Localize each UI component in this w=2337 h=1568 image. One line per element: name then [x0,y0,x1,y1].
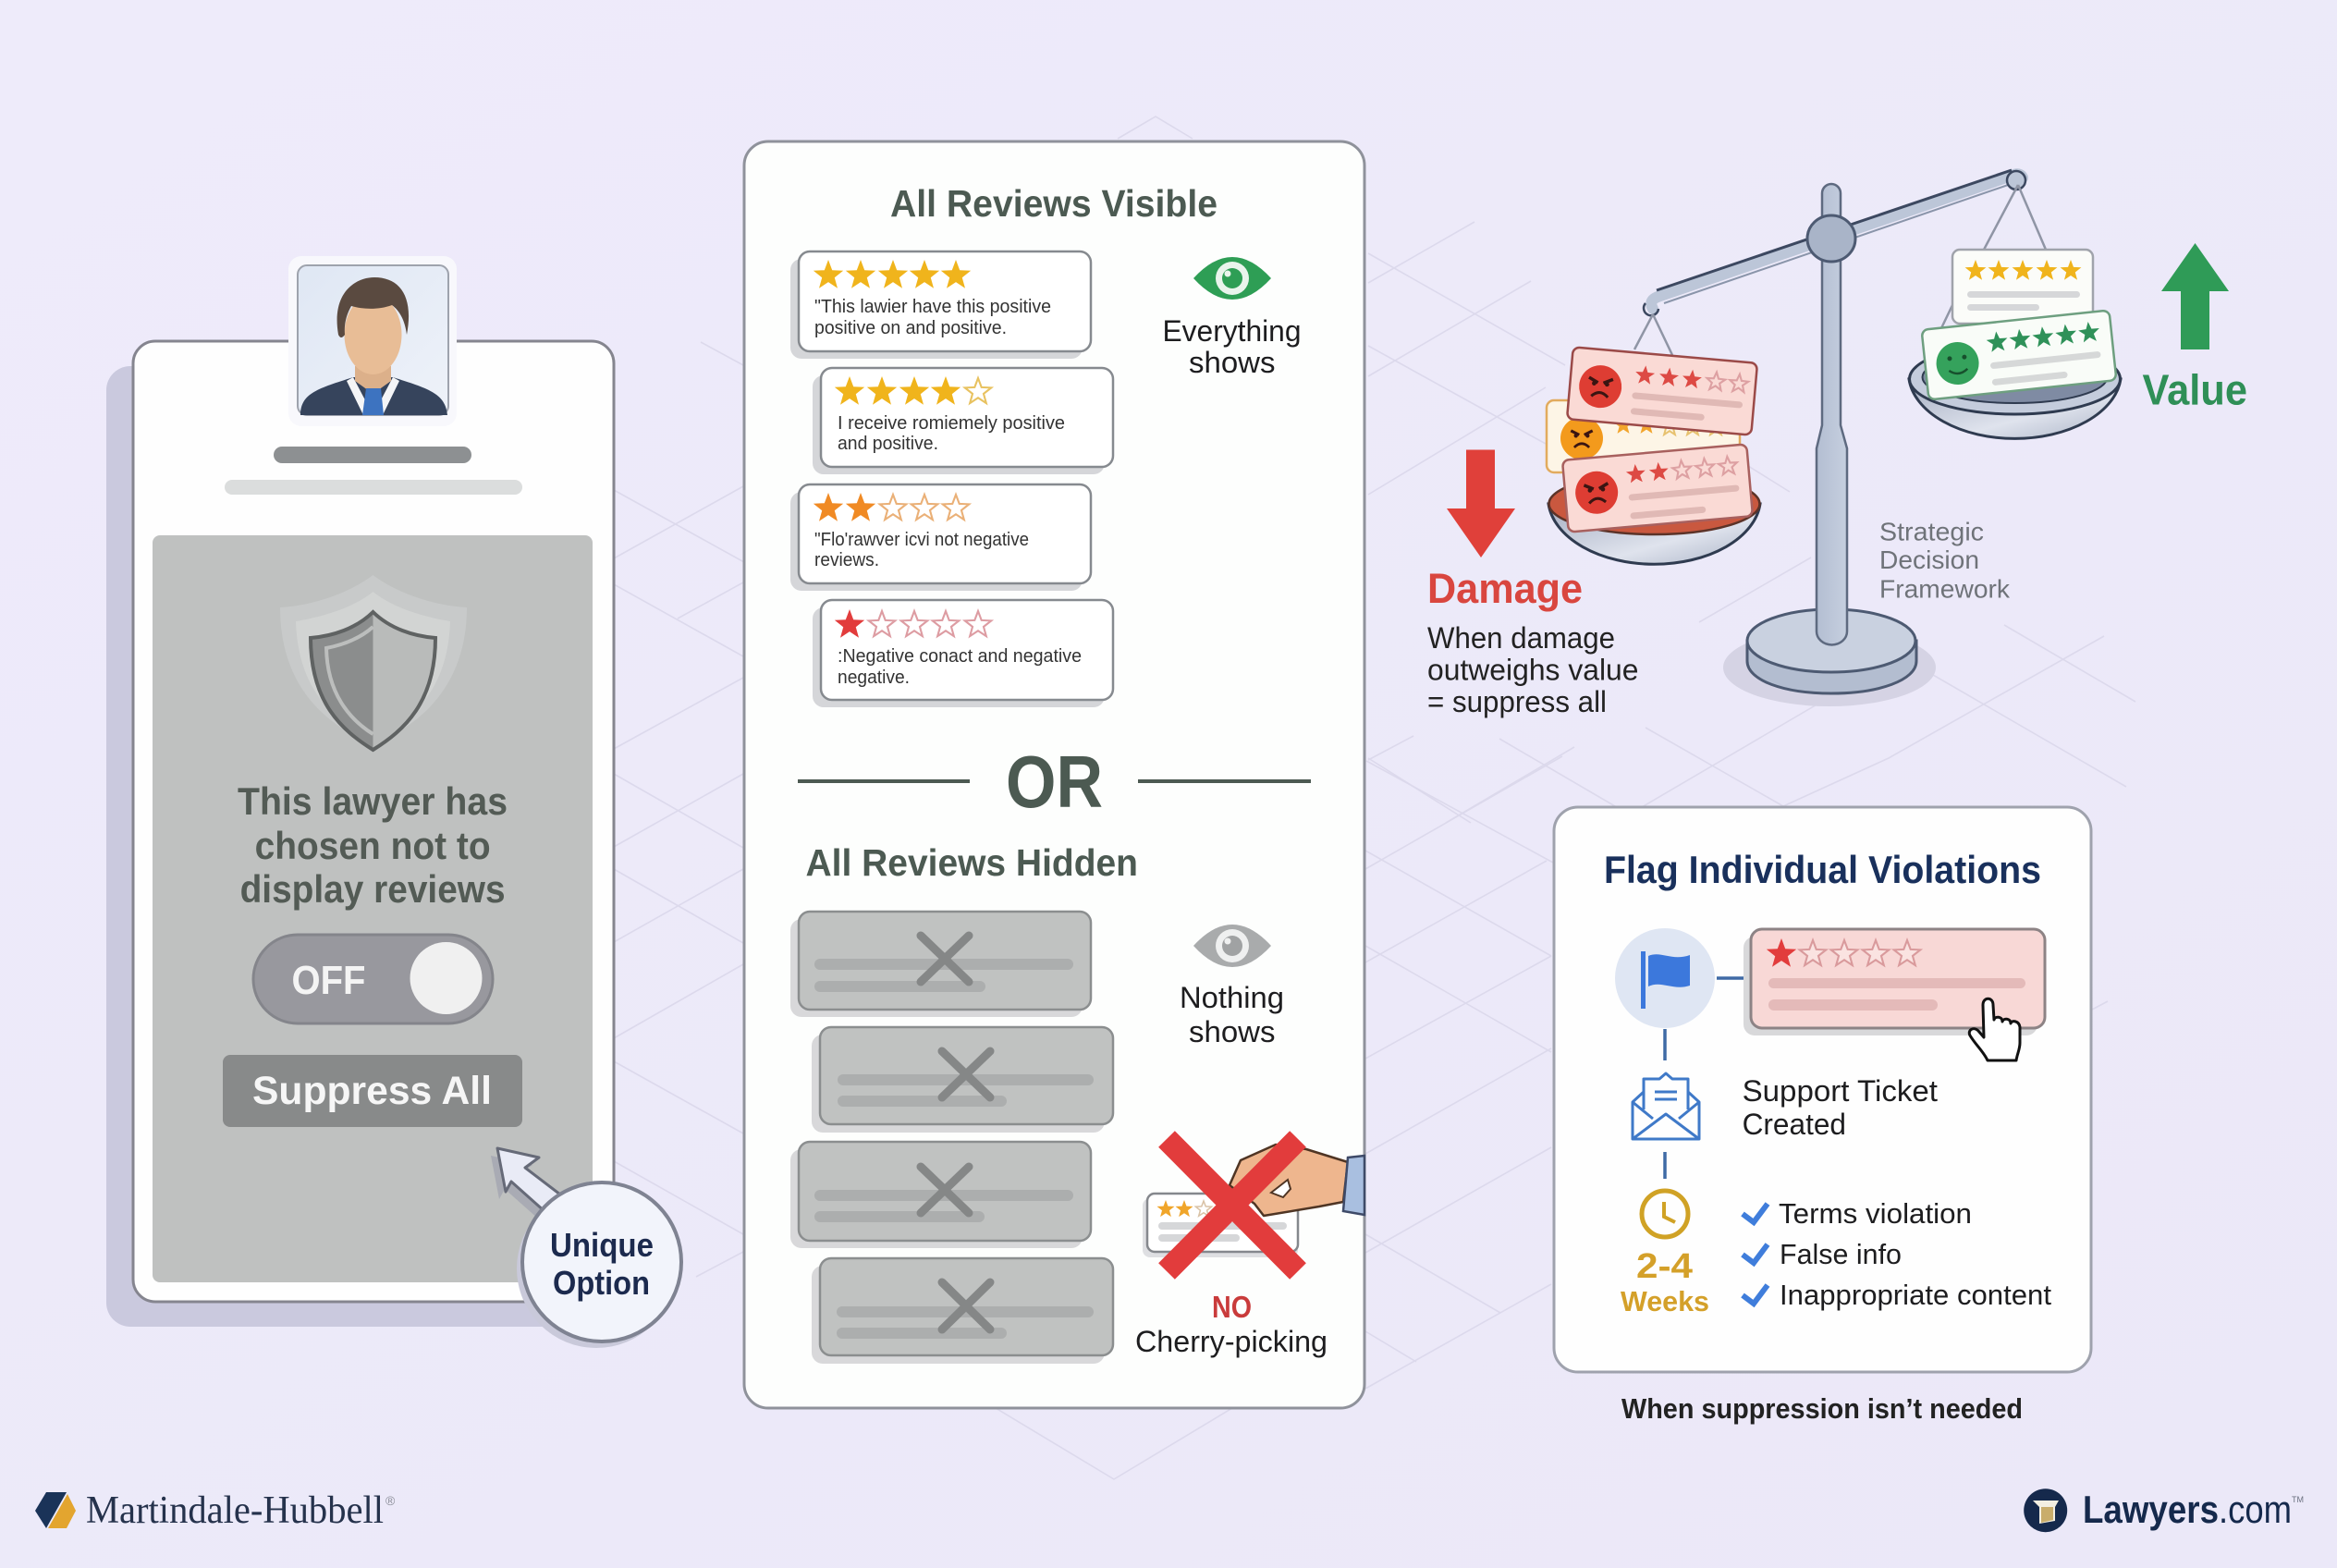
checklist: violation types: Terms violation [1779,1197,1972,1230]
arrow: damage down [1447,449,1515,557]
arrow: to suppress all [491,1148,560,1219]
review card: two stars: reviews. [814,550,879,570]
review card: two stars [790,484,1091,591]
scale beam [1644,170,2025,315]
logo: lawyers.com: .com [2219,1488,2292,1531]
text: suppression notice: display reviews [240,867,506,911]
review card: one star: negative. [838,668,910,688]
label: everything shows: Everything [1163,314,1302,348]
heading: all reviews hidden: All Reviews Hidden [806,841,1138,884]
text: damage rule: outweighs value [1427,653,1638,686]
panel: lawyer profile with suppress all [106,256,681,1348]
logo: lawyers.com [2024,1488,2304,1532]
illustration: balance scale [1547,170,2121,706]
review card: one star: :Negative conact and negative [838,646,1082,667]
icon: flag [1615,928,1715,1028]
logo: lawyers.com: Lawyers [2083,1488,2219,1531]
callout: unique option [517,1182,681,1348]
scale stand [1723,184,1936,706]
icon: green eye [1193,257,1271,300]
label: 2-4 weeks [1621,1247,1709,1317]
heading: all reviews visible: All Reviews Visible [890,182,1217,225]
label: nothing shows: Nothing [1180,981,1284,1014]
toggle: off: OFF [292,958,366,1003]
label: nothing shows: shows [1189,1015,1276,1048]
icon: lawyer portrait [288,256,457,426]
logo: martindale-hubbell: ® [385,1493,396,1508]
right pan with value reviews [1909,185,2121,438]
callout: unique option: Unique [550,1226,654,1264]
text: support ticket created: Created [1743,1108,1846,1141]
label: no cherry-picking: NO [1212,1290,1252,1324]
panel: flag individual violations [1554,807,2091,1372]
checklist: violation types: False info [1780,1238,1902,1270]
button: suppress all [223,1055,522,1127]
label: nothing shows [1180,981,1284,1048]
hidden review card 3 [790,1142,1091,1248]
review card: four stars [813,368,1113,474]
divider: or [798,741,1311,823]
label: value: Value [2143,366,2247,414]
checklist: violation types: Inappropriate content [1780,1279,2051,1311]
text: suppression notice [238,779,508,911]
text: damage rule: = suppress all [1427,685,1607,718]
icon: pointer hand [1969,998,2020,1060]
text: damage rule: When damage [1427,621,1615,655]
left pan with damage reviews [1547,314,1760,564]
label: everything shows: shows [1189,346,1276,379]
review card: four stars: and positive. [838,434,938,454]
text: strategic decision framework: Strategic [1879,518,1984,545]
label: damage: Damage [1427,565,1583,612]
label: 2-4 weeks: Weeks [1621,1285,1709,1317]
review card: five stars [790,251,1091,359]
callout: unique option: Option [553,1264,650,1302]
review card: five stars: positive on and positive. [814,318,1007,338]
caption: when suppression isn't needed: When suppression isn’t needed [1621,1392,2023,1425]
text: suppression notice: This lawyer has [238,779,508,823]
label: 2-4 weeks: 2-4 [1636,1247,1693,1286]
text: strategic decision framework [1879,518,2011,603]
hidden review card 4 [812,1258,1113,1364]
text: support ticket created [1743,1074,1938,1141]
panel: suppressed overlay [153,535,593,1282]
divider: or: OR [1006,741,1103,823]
icon: clock [1642,1191,1688,1237]
label: no cherry-picking [1135,1290,1328,1358]
icon: shield [280,575,467,750]
flagged review card [1744,929,2045,1035]
review card: four stars: I receive romiemely positive [838,413,1065,434]
review card: five stars: "This lawier have this positive [814,297,1051,317]
label: no cherry-picking: Cherry-picking [1135,1325,1328,1358]
text: support ticket created: Support Ticket [1743,1074,1938,1108]
hidden review card 2 [812,1027,1113,1133]
heading: flag individual violations: Flag Individual Violations [1604,848,2041,891]
illustration: no cherry-picking [1143,1139,1364,1271]
toggle: off [253,935,493,1023]
logo: martindale-hubbell: Martindale-Hubbell [86,1489,384,1532]
checklist: violation types [1743,1197,2051,1311]
text: damage rule [1427,621,1638,718]
review card: two stars: "Flo'rawver icvi not negative [814,530,1029,550]
button: suppress all: Suppress All [252,1069,492,1113]
text: suppression notice: chosen not to [255,824,491,867]
icon: envelope [1633,1073,1699,1139]
icon: grey eye [1193,925,1271,967]
hidden review card 1 [790,912,1091,1017]
label: everything shows [1163,314,1302,379]
text: strategic decision framework: Framework [1879,575,2011,603]
review card: one star [813,600,1113,707]
text: strategic decision framework: Decision [1879,545,1979,574]
arrow: value up [2161,243,2229,349]
panel: all or nothing [744,141,1364,1408]
logo: lawyers.com: TM [2292,1495,2304,1504]
